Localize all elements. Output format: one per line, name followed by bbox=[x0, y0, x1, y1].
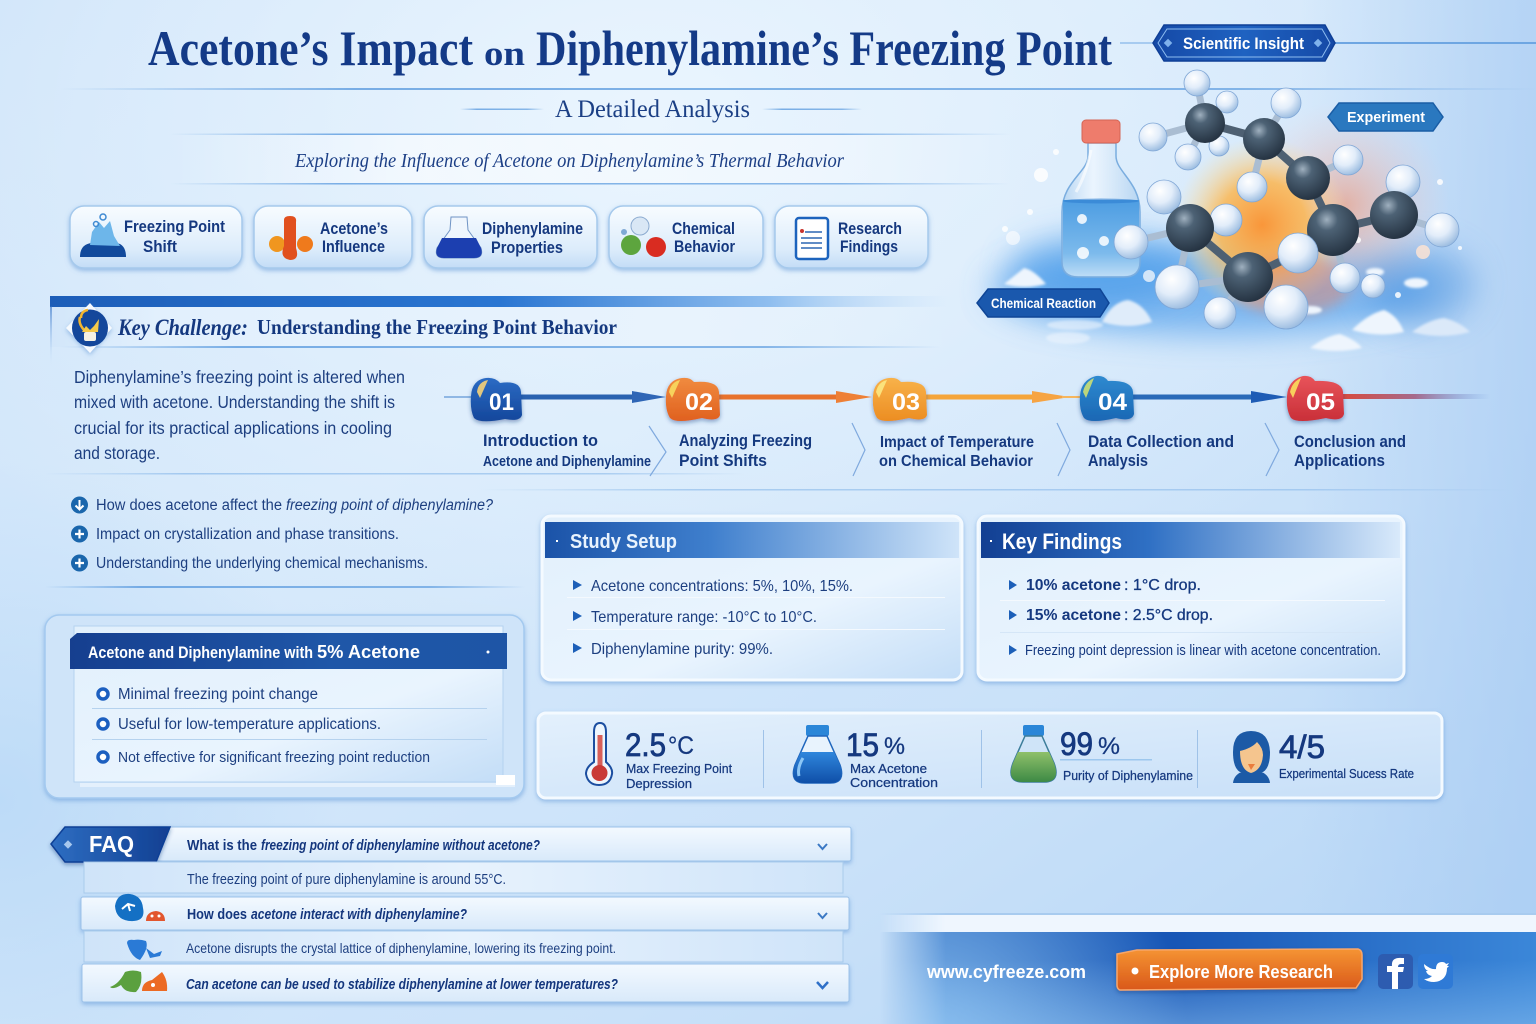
step labels: Analysis bbox=[1088, 451, 1148, 470]
step badge 01 bbox=[471, 378, 522, 421]
tag: Chemical Reaction: Chemical Reaction bbox=[991, 296, 1096, 311]
button: Diphenylamine Properties bbox=[424, 206, 597, 268]
FAQ section bbox=[51, 827, 851, 1002]
step labels: Data Collection and bbox=[1088, 432, 1234, 451]
stat: purity of diphenylamine: % bbox=[1098, 733, 1120, 760]
button: Research Findings bbox=[775, 206, 928, 268]
stat: purity of diphenylamine: Purity of Diphenylamine bbox=[1063, 768, 1193, 783]
topic buttons bbox=[70, 206, 928, 268]
stat: experimental success rate: Experimental Sucess Rate bbox=[1279, 766, 1414, 781]
call to action button: Explore More Research bbox=[1149, 961, 1333, 982]
button: Research Findings: Findings bbox=[840, 238, 898, 256]
step labels: Analyzing Freezing bbox=[679, 431, 812, 450]
faq answer 1 bbox=[84, 862, 843, 893]
step labels: Introduction to bbox=[483, 431, 598, 450]
icon: blue flask bbox=[793, 725, 842, 783]
tag: Experiment bbox=[1328, 103, 1443, 131]
step labels: Applications bbox=[1294, 451, 1385, 470]
faq tag: FAQ bbox=[89, 831, 134, 857]
icon: thermometer bbox=[586, 723, 612, 785]
step badge 04 bbox=[1080, 376, 1134, 421]
faq row 3 bbox=[82, 964, 849, 1002]
step badge 02 bbox=[666, 378, 720, 421]
stat: max freezing point depression: °C bbox=[668, 732, 694, 760]
icon: ice and water bbox=[80, 214, 126, 257]
bullet: icon down bbox=[71, 496, 88, 514]
panel header: Study Setup bbox=[570, 531, 677, 553]
step labels bbox=[483, 431, 1406, 470]
icon: twitter bbox=[1418, 954, 1453, 989]
step separators bbox=[649, 423, 1279, 476]
button: Diphenylamine Properties: Diphenylamine bbox=[482, 220, 583, 238]
step labels: Conclusion and bbox=[1294, 432, 1406, 451]
stat: max acetone concentration: Max Acetone bbox=[850, 761, 927, 776]
stats bar bbox=[538, 713, 1442, 798]
bullet: icon plus bbox=[71, 526, 88, 542]
panel: key findings bbox=[978, 516, 1404, 680]
faq answer 2 bbox=[84, 931, 843, 962]
icon: light bulb badge bbox=[66, 303, 112, 353]
panel list bbox=[92, 686, 487, 766]
timeline connectors and arrows bbox=[444, 391, 1490, 403]
key challenge banner bbox=[50, 296, 950, 366]
step badge 04: 04 bbox=[1098, 389, 1128, 416]
panel list: Minimal freezing point change bbox=[118, 686, 318, 703]
panel list bbox=[1000, 577, 1385, 659]
panel list: Temperature range: -10°C to 10°C. bbox=[591, 609, 817, 626]
title bbox=[148, 20, 1112, 76]
hydrogen atoms, front bbox=[1114, 225, 1385, 329]
step badge 05: 05 bbox=[1306, 389, 1335, 416]
panel header bbox=[545, 522, 959, 558]
button: Acetone's Influence bbox=[254, 206, 412, 268]
questions list bbox=[71, 496, 493, 572]
step badge 03 bbox=[873, 378, 927, 421]
step badge 05 bbox=[1287, 376, 1344, 421]
panel header: Acetone and Diphenylamine with bbox=[88, 644, 313, 662]
tagline band bbox=[170, 134, 1020, 184]
panel list bbox=[567, 578, 945, 658]
snow particles bbox=[1002, 149, 1462, 298]
faq row 3: Can acetone can be used to stabilize diphenylamine at lower temperatures? bbox=[186, 977, 618, 993]
stat: purity of diphenylamine: 99 bbox=[1060, 726, 1093, 762]
panel: study setup bbox=[542, 516, 962, 680]
panel list: : 1°C drop. bbox=[1124, 577, 1201, 594]
panel header bbox=[981, 522, 1400, 558]
hydrogen atoms, back bbox=[1139, 70, 1459, 247]
panel list: 15% acetone bbox=[1026, 607, 1121, 624]
key challenge banner: Understanding the Freezing Point Behavior bbox=[257, 315, 617, 339]
subtitle: A Detailed Analysis bbox=[555, 96, 750, 123]
panel: 5% acetone bbox=[45, 615, 524, 798]
button: Freezing Point Shift: Shift bbox=[143, 238, 177, 256]
faq row 2 bbox=[81, 894, 849, 930]
stat: max acetone concentration: % bbox=[884, 733, 905, 760]
panel header: Key Findings bbox=[1002, 529, 1122, 554]
icon: blue flask bbox=[436, 217, 482, 258]
title: on bbox=[484, 34, 525, 73]
faq answer 1: The freezing point of pure diphenylamine is around 55°C. bbox=[187, 872, 506, 888]
button: Chemical Behavior: Chemical bbox=[672, 220, 735, 238]
stat: max freezing point depression: Max Freezing Point bbox=[626, 761, 732, 776]
button: Diphenylamine Properties: Properties bbox=[491, 239, 563, 257]
title: Diphenylamine’s Freezing Point bbox=[536, 20, 1112, 76]
button: Freezing Point Shift: Freezing Point bbox=[124, 218, 225, 236]
stat: experimental success rate: 4/5 bbox=[1279, 729, 1325, 765]
tag: Scientific Insight bbox=[1120, 25, 1536, 61]
tag: Scientific Insight: Scientific Insight bbox=[1183, 34, 1304, 53]
button: Chemical Behavior bbox=[609, 206, 763, 268]
tagline band: Exploring the Influence of Acetone on Diphenylamine’s Thermal Behavior bbox=[294, 150, 844, 172]
icon: green flask bbox=[1011, 725, 1056, 782]
key challenge paragraph: crucial for its practical applications in cooling bbox=[74, 418, 392, 438]
panel list: Useful for low-temperature applications. bbox=[118, 716, 381, 733]
call to action button bbox=[1117, 949, 1362, 990]
panel list: Diphenylamine purity: 99%. bbox=[591, 641, 773, 658]
illustration: flask and molecule on ice bbox=[990, 70, 1475, 351]
bottle cap bbox=[1082, 120, 1120, 143]
tag: Experiment: Experiment bbox=[1347, 109, 1425, 126]
panel list: : 2.5°C drop. bbox=[1124, 607, 1213, 624]
step labels: on Chemical Behavior bbox=[879, 453, 1033, 470]
panel list: Acetone concentrations: 5%, 10%, 15%. bbox=[591, 578, 853, 595]
stat: experimental success rate bbox=[1233, 729, 1414, 783]
bullet text 2: Impact on crystallization and phase transitions. bbox=[96, 526, 399, 543]
key challenge banner: Key Challenge: bbox=[117, 315, 248, 340]
stat: max acetone concentration bbox=[793, 725, 938, 790]
stat: max acetone concentration: Concentration bbox=[850, 775, 938, 790]
panel list: Not effective for significant freezing point reduction bbox=[118, 749, 430, 766]
icon: facebook bbox=[1378, 954, 1413, 989]
key challenge paragraph: Diphenylamine’s freezing point is altered when bbox=[74, 367, 405, 387]
button: Acetone's Influence: Influence bbox=[322, 238, 385, 256]
step labels: Impact of Temperature bbox=[880, 434, 1034, 451]
bullet text 1: How does acetone affect the bbox=[96, 497, 282, 514]
process timeline bbox=[444, 376, 1490, 476]
icon: blue heart bbox=[127, 940, 162, 960]
molecule bbox=[1114, 70, 1459, 329]
stat: purity of diphenylamine bbox=[1011, 725, 1193, 783]
bullet: icon plus bbox=[71, 554, 88, 572]
faq row 1: freezing point of diphenylamine without acetone? bbox=[261, 838, 540, 854]
faq row 1 bbox=[150, 827, 851, 861]
icon: person bbox=[1233, 731, 1270, 783]
icon: document bbox=[796, 218, 828, 259]
button: Research Findings: Research bbox=[838, 220, 902, 238]
bonds bbox=[1131, 83, 1442, 313]
key challenge paragraph: and storage. bbox=[74, 443, 160, 463]
step badge 02: 02 bbox=[685, 389, 713, 416]
faq answer 2: Acetone disrupts the crystal lattice of diphenylamine, lowering its freezing point. bbox=[186, 940, 616, 956]
icon: molecule cluster bbox=[621, 217, 666, 257]
stat: max freezing point depression bbox=[586, 723, 732, 791]
step labels: Point Shifts bbox=[679, 451, 767, 470]
button: Acetone's Influence: Acetone’s bbox=[320, 220, 388, 238]
step labels: Acetone and Diphenylamine bbox=[483, 454, 651, 470]
panel list: Freezing point depression is linear with acetone concentration. bbox=[1025, 643, 1381, 659]
faq tag bbox=[51, 827, 170, 862]
faq row 2: acetone interact with diphenylamine? bbox=[251, 907, 467, 923]
icon: green and orange blobs bbox=[110, 970, 167, 992]
footer bbox=[880, 913, 1536, 1024]
panel header bbox=[70, 633, 507, 669]
blue ice cloud bbox=[990, 235, 1475, 335]
step badge 03: 03 bbox=[892, 389, 920, 416]
faq row 2: How does bbox=[187, 907, 247, 923]
key challenge paragraph: mixed with acetone. Understanding the shift is bbox=[74, 392, 395, 412]
ice mounds bbox=[1004, 268, 1470, 351]
bullet text 1: freezing point of diphenylamine? bbox=[286, 497, 493, 514]
tag: Chemical Reaction bbox=[977, 289, 1109, 317]
panel list: 10% acetone bbox=[1026, 577, 1121, 594]
panel header: 5% Acetone bbox=[317, 641, 420, 662]
bullet text 3: Understanding the underlying chemical mechanisms. bbox=[96, 555, 428, 572]
button: Freezing Point Shift bbox=[70, 206, 242, 268]
stat: max freezing point depression: Depression bbox=[626, 776, 692, 791]
icon: orange molecule bbox=[269, 216, 313, 260]
key challenge paragraph bbox=[74, 367, 405, 463]
bottle bbox=[1062, 120, 1140, 277]
bullet text 1 bbox=[96, 497, 493, 514]
icon: blue and red blobs bbox=[115, 894, 165, 921]
step badge 01: 01 bbox=[489, 389, 514, 416]
title: Acetone’s Impact bbox=[148, 20, 473, 76]
button: Chemical Behavior: Behavior bbox=[674, 238, 735, 256]
website url: www.cyfreeze.com bbox=[926, 961, 1086, 982]
carbon atoms bbox=[1166, 103, 1418, 302]
warm glow bbox=[1174, 100, 1450, 315]
faq row 1: What is the bbox=[187, 838, 257, 854]
stat: max freezing point depression: 2.5 bbox=[625, 727, 666, 763]
stat: max acetone concentration: 15 bbox=[846, 727, 879, 763]
